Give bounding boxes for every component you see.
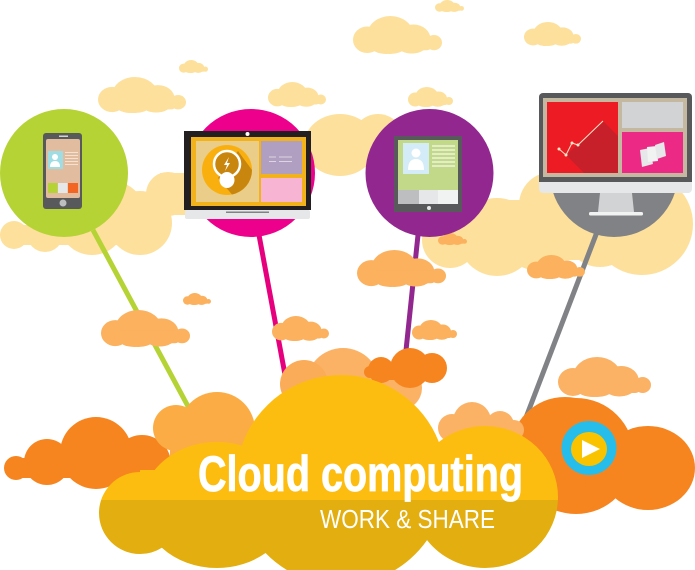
small orange cloud: under tablet (438, 233, 467, 245)
panel: phone device (0, 109, 128, 237)
panel: laptop device (184, 109, 315, 237)
phone circle (0, 109, 128, 237)
back cloud: orange right (510, 397, 695, 514)
main cloud (90, 370, 570, 570)
back cloud: light orange right (438, 402, 524, 442)
back cloud: light orange left (153, 392, 255, 468)
icon: laptop (184, 131, 311, 219)
laptop circle (187, 109, 315, 237)
connector line: gray (525, 232, 597, 420)
back cloud: light orange top (280, 348, 422, 422)
small orange cloud: magenta line (272, 316, 329, 341)
small orange cloud: purple line (412, 320, 457, 340)
icon: tablet (394, 136, 462, 212)
icon: light bulb (202, 145, 252, 195)
subtitle: WORK & SHARE: WORK & SHARE (320, 504, 495, 534)
pale cloud: behind phone (0, 172, 200, 255)
pale background cloud: top large (353, 16, 442, 54)
icon: papers (640, 142, 666, 167)
back cloud: dark orange small (364, 348, 447, 388)
icon: play button (562, 421, 616, 475)
pale cloud: large behind tablet and monitor (422, 172, 693, 276)
pale background cloud: top right (524, 22, 581, 46)
line chart (558, 121, 603, 156)
connector line: magenta (259, 235, 286, 380)
back cloud: orange left (4, 417, 171, 493)
small orange cloud: right of gray line (558, 357, 651, 397)
connector line: purple (405, 235, 418, 360)
panel: tablet device (366, 109, 494, 237)
icon: monitor (539, 93, 692, 216)
tablet circle (366, 109, 494, 237)
panel: monitor device (539, 93, 692, 237)
connector line: green (93, 230, 190, 410)
pale background cloud: above laptop left (179, 60, 208, 73)
pale background cloud: upper left (98, 77, 186, 113)
small orange cloud: gray line (527, 255, 585, 279)
small orange cloud: green line (101, 310, 190, 347)
monitor circle (550, 109, 678, 237)
icon: phone (43, 133, 82, 209)
pale background cloud: top small (435, 0, 464, 12)
small orange cloud: left of tablet line (357, 250, 446, 287)
pale background cloud: above laptop (268, 82, 326, 107)
title: Cloud computing: Cloud computing (198, 446, 523, 502)
pale cloud: behind laptop right (304, 114, 404, 176)
small orange cloud: tiny (183, 293, 211, 305)
pale background cloud: above tablet (408, 87, 453, 107)
